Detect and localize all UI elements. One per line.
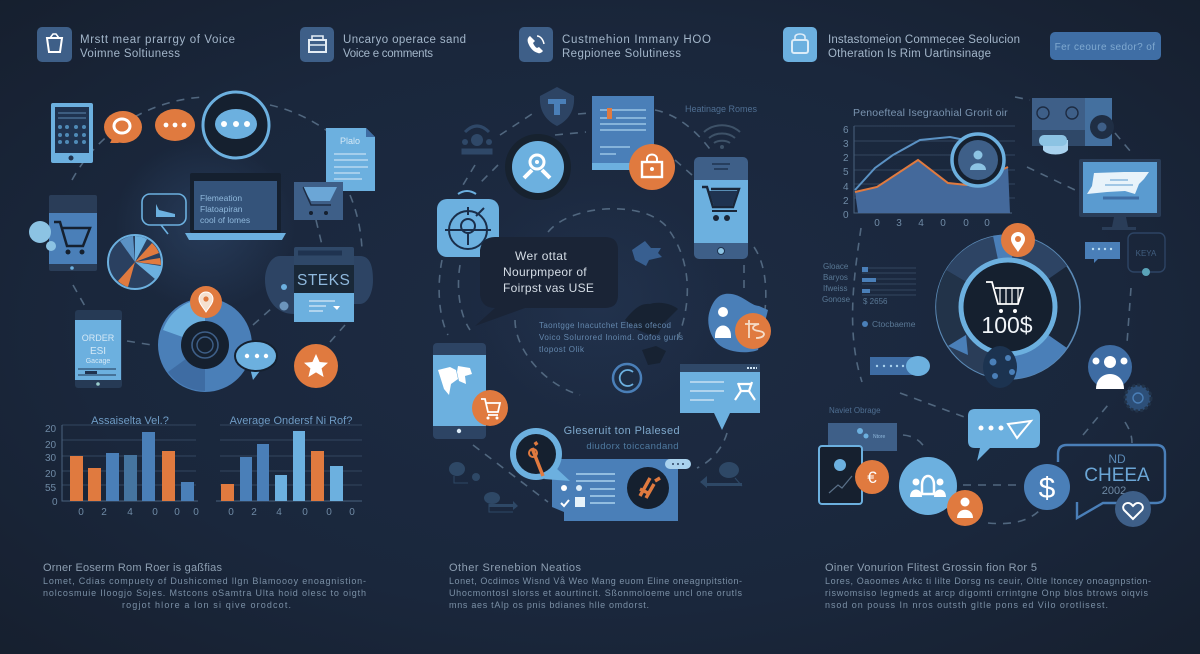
pie chart — [108, 235, 162, 289]
header item: briefcase: Uncaryo operace sand — [343, 34, 466, 46]
icon: dollar — [1024, 464, 1070, 510]
callout: dark speech bubble: Wer ottat — [515, 249, 567, 263]
area line chart: 0 — [874, 218, 880, 229]
header item: briefcase: Voice e comments — [343, 48, 433, 60]
card: STEKS: STEKS — [297, 272, 350, 289]
area line chart: 0 — [843, 210, 849, 221]
panel: center column illustration — [433, 87, 771, 521]
callout: ND CHEEA: CHEEA — [1084, 465, 1150, 486]
text block: left: Orner Eoserm Rom Roer is gaßfias — [43, 562, 222, 574]
text block: center — [449, 562, 742, 610]
bar chart: right: Average Ondersf Ni Rof? — [230, 415, 352, 427]
header item: phone — [519, 27, 711, 62]
bar chart: left: 55 — [45, 483, 57, 494]
header item: shopping bag — [37, 27, 235, 62]
icon: box cluster — [1032, 98, 1114, 154]
text block: center: Other Srenebion Neatios — [449, 562, 582, 574]
icon: heart — [1115, 491, 1151, 527]
icon: wifi with label — [685, 104, 758, 149]
area line chart: 3 — [843, 139, 849, 150]
text block: center: Lonet, Ocdimos Wisnd Vå Weo Mang euom Eline oneagnpitstion- — [449, 576, 742, 586]
area line chart: 2 — [843, 196, 849, 207]
text block: right — [825, 562, 1151, 610]
text block: center small — [539, 321, 683, 354]
header item: phone: Custmehion Immany HOO — [562, 34, 711, 46]
area line chart: 6 — [843, 125, 849, 136]
icon: wifi with label: Heatinage Romes — [685, 104, 758, 114]
dashed orbit right — [853, 97, 1132, 524]
callout: ND CHEEA: 2002 — [1102, 485, 1126, 497]
icon: laptop: cool of lomes — [200, 215, 250, 225]
bar chart: left: 0 — [78, 507, 84, 518]
icon: chat send bubble — [968, 409, 1040, 461]
area line chart: 0 — [984, 218, 990, 229]
bar chart: right: 0 — [228, 507, 234, 518]
bar chart: left: 4 — [127, 507, 133, 518]
header row — [37, 27, 1161, 62]
icon: people circle — [1088, 345, 1132, 389]
callout: ND CHEEA: ND — [1108, 452, 1126, 466]
callout: dark speech bubble: Nourpmpeor of — [503, 265, 587, 279]
bar chart: right: 0 — [349, 507, 355, 518]
map silhouette — [625, 303, 678, 365]
legend list: Gonose — [822, 295, 851, 304]
icon: document — [326, 128, 375, 191]
icon: order phone: Gacage — [86, 358, 110, 365]
callout: ND CHEEA — [1058, 445, 1165, 518]
icon: laptop — [185, 173, 286, 240]
callout: dark speech bubble — [475, 237, 618, 326]
card: STEKS — [265, 247, 373, 322]
icon: faded cluster — [462, 126, 492, 153]
panel: left column illustration — [29, 92, 375, 392]
bar chart: right: 2 — [251, 507, 257, 518]
icon: star — [294, 344, 338, 388]
icon: orange bubble ring — [104, 111, 142, 143]
icon: report document — [592, 96, 654, 170]
header item: briefcase — [300, 27, 466, 62]
text block: right: Lores, Oaoomes Arkc ti lilte Dorsg ns ceuir, Oltle ltoncey onoagnpstion- — [825, 576, 1151, 586]
icon: gear — [1125, 385, 1151, 411]
donut: 100$ — [936, 223, 1080, 388]
area line chart: 4 — [918, 218, 924, 229]
header item: shopping bag: Voimne Soltiuness — [80, 48, 180, 60]
legend list: Gloace — [823, 262, 849, 271]
icon: orange bubble dots — [155, 109, 195, 141]
text block: left — [43, 562, 366, 610]
text block: left: rogjot hlore a lon si qive orodcot. — [122, 600, 291, 610]
icon: outlined speech — [142, 194, 186, 234]
icon: shield — [540, 87, 574, 126]
text block: center small: tlopost Olik — [539, 345, 585, 354]
icon: growth frame with badge: € — [867, 468, 877, 487]
dashed orbit left — [72, 97, 362, 345]
donut: 100$: 100$ — [981, 312, 1033, 338]
area line chart: 4 — [843, 182, 849, 193]
header item: lock tile: Instastomeion Commecee Seolucion — [828, 34, 1020, 46]
area line chart: Penoefteal Isegraohial Grorit oir — [853, 107, 1008, 119]
area line chart: 3 — [896, 218, 902, 229]
bar chart: left: Assaiselta Vel.? — [91, 415, 169, 427]
text block: right: Oiner Vonurion Flitest Grossin fion Ror 5 — [825, 562, 1037, 574]
panel: right column illustration — [819, 97, 1165, 527]
text block: left: nolcosmuie Iloogjo Sojes. Mstcons oSamtra Ulta hoid olesc to oigth — [43, 588, 366, 598]
area line chart — [843, 107, 1015, 229]
donut with pin — [158, 286, 252, 392]
icon: C badge — [613, 364, 641, 392]
icon: dollar: $ — [1039, 472, 1056, 505]
header item: shopping bag: Mrstt mear prarrgy of Voice — [80, 34, 235, 46]
bar chart: left: 20 — [45, 440, 57, 451]
bar chart: left: 0 — [52, 497, 58, 508]
text block: right: nsod on pouss In nros outsth gltle pons ed Vilo orotlisest. — [825, 600, 1108, 610]
icon: monitor — [1079, 159, 1161, 230]
text block: left: Lomet, Cdias compuety of Dushicomed llgn Blamoooy enoagnistion- — [43, 576, 366, 586]
text block: center caption — [564, 425, 680, 452]
text block: center: Uhocmontosl slorss et aourtincit. Sßonmoloeme uncl one orutls — [449, 588, 742, 598]
area line chart: 0 — [940, 218, 946, 229]
area line chart: 5 — [843, 167, 849, 178]
icon: order phone: ORDER — [82, 333, 115, 343]
header button — [1050, 32, 1161, 60]
legend list — [822, 262, 916, 329]
bar chart: right: 0 — [302, 507, 308, 518]
icon: search pin — [510, 428, 570, 481]
header item: lock tile — [783, 27, 1020, 62]
text block: center caption: diudorx toiccandand — [586, 441, 679, 452]
icon: chat dots — [235, 341, 277, 380]
text block: center: mns aes tAlp os pnis bdianes hlle omdorst. — [449, 600, 649, 610]
icon: phone cart center — [694, 157, 748, 259]
icon: small chat — [1085, 242, 1120, 263]
header button: Fer ceoure sedor? of — [1055, 42, 1155, 53]
legend list: Baryos — [823, 273, 848, 282]
icon: cart card — [294, 182, 343, 220]
icon: target tile — [437, 191, 499, 257]
text block: center small: Voico Solurored Inoimd. Oofos gurls — [539, 333, 683, 342]
icon: magnifier — [505, 134, 571, 200]
icon: laptop: Flatoapiran — [200, 204, 243, 214]
icon: order phone: ESI — [90, 346, 106, 357]
card: task list — [552, 459, 691, 521]
icon: tablet — [51, 103, 93, 163]
bar chart: left: 20 — [45, 469, 57, 480]
area line chart: 0 — [963, 218, 969, 229]
legend list: Ctocbaeme — [872, 319, 916, 329]
icon: map phone — [433, 343, 508, 439]
icon: laptop: Flemeation — [200, 193, 242, 203]
legend list: $ 2656 — [863, 297, 888, 306]
legend list: Ifweiss — [823, 284, 847, 293]
bar chart: left: 0 — [152, 507, 158, 518]
bar chart: right: 0 — [326, 507, 332, 518]
icon: ringed chat — [203, 92, 269, 158]
icon: message window — [680, 364, 760, 430]
icon: group circle — [899, 457, 983, 526]
bar chart: left: 2 — [101, 507, 107, 518]
bar chart: left: 0 — [193, 507, 199, 518]
icon: person and orange badge — [708, 294, 771, 352]
bar chart: left: 20 — [45, 424, 57, 435]
pill: dots — [870, 356, 930, 376]
icon: growth frame with badge: Naviet Obrage — [829, 406, 881, 415]
faded flow nodes — [449, 462, 742, 512]
icon: orange lock — [629, 144, 675, 190]
bar chart: left: 30 — [45, 453, 57, 464]
icon: growth frame with badge: Ntore — [873, 434, 885, 440]
text block: center caption: Gleseruit ton Plalesed — [564, 425, 680, 437]
text block: right: riswomsiso legmeds at arcp digomti crrintgne Onp blos btrows oiqvis — [825, 588, 1148, 598]
icon: outlined tag — [1128, 233, 1165, 276]
bar chart: right — [216, 415, 362, 518]
icon: growth frame with badge — [819, 406, 897, 504]
callout: dark speech bubble: Foirpst vas USE — [503, 281, 594, 295]
icon: order phone — [75, 310, 122, 388]
header item: lock tile: Otheration Is Rim Uartinsinage — [828, 48, 991, 60]
icon: document: Plalo — [340, 136, 360, 146]
dashed orbit center — [439, 110, 766, 502]
icon: outlined tag: KEYA — [1136, 249, 1157, 258]
area line chart: 2 — [843, 153, 849, 164]
text block: center small: Taontgge Inacutchet Eleas ofecod — [539, 321, 671, 330]
header item: phone: Regpionee Solutiness — [562, 48, 681, 60]
icon: phone cart — [29, 195, 97, 271]
bar chart: left: 0 — [174, 507, 180, 518]
bar chart: right: 4 — [276, 507, 282, 518]
bar chart: left — [45, 415, 199, 518]
icon: hand — [632, 241, 662, 266]
